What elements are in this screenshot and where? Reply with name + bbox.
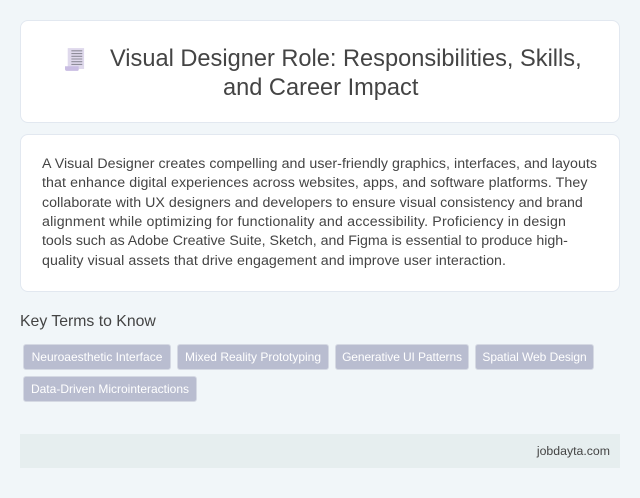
footer bar <box>20 434 620 468</box>
description text: collaborate with UX designers and developers to ensure visual consistency and brand <box>42 195 583 211</box>
description text: tools such as Adobe Creative Suite, Sketch, and Figma is essential to produce high- <box>42 233 568 249</box>
title card <box>20 20 620 123</box>
title: and Career Impact <box>223 75 418 101</box>
chip: Neuroaesthetic Interface <box>23 344 171 370</box>
title <box>110 46 582 101</box>
key term chips <box>23 344 594 402</box>
chip: Generative UI Patterns: Generative UI Patterns <box>342 350 462 364</box>
chip: Neuroaesthetic Interface: Neuroaesthetic Interface <box>32 350 162 364</box>
chip: Mixed Reality Prototyping <box>177 344 329 370</box>
chip: Data-Driven Microinteractions: Data-Driven Microinteractions <box>31 382 189 396</box>
chip: Spatial Web Design: Spatial Web Design <box>482 350 587 364</box>
chip: Generative UI Patterns <box>335 344 469 370</box>
description text: A Visual Designer creates compelling and user-friendly graphics, interfaces, and layouts <box>42 156 597 172</box>
chip: Mixed Reality Prototyping: Mixed Reality Prototyping <box>185 350 321 364</box>
icon: document scroll <box>65 48 84 71</box>
description text: alignment while optimizing for functionality and accessibility. Proficiency in design <box>42 214 566 230</box>
footer source: jobdayta.com <box>537 444 610 458</box>
heading: key terms: Key Terms to Know <box>20 313 156 330</box>
title: Visual Designer Role: Responsibilities, Skills, <box>110 46 582 72</box>
chip: Data-Driven Microinteractions <box>23 376 197 402</box>
description text: quality visual assets that drive engagement and improve user interaction. <box>42 253 506 269</box>
description card <box>20 134 620 292</box>
chip: Spatial Web Design <box>475 344 594 370</box>
description text: that enhance digital experiences across websites, apps, and software platforms. They <box>42 175 588 191</box>
description text <box>42 156 597 269</box>
